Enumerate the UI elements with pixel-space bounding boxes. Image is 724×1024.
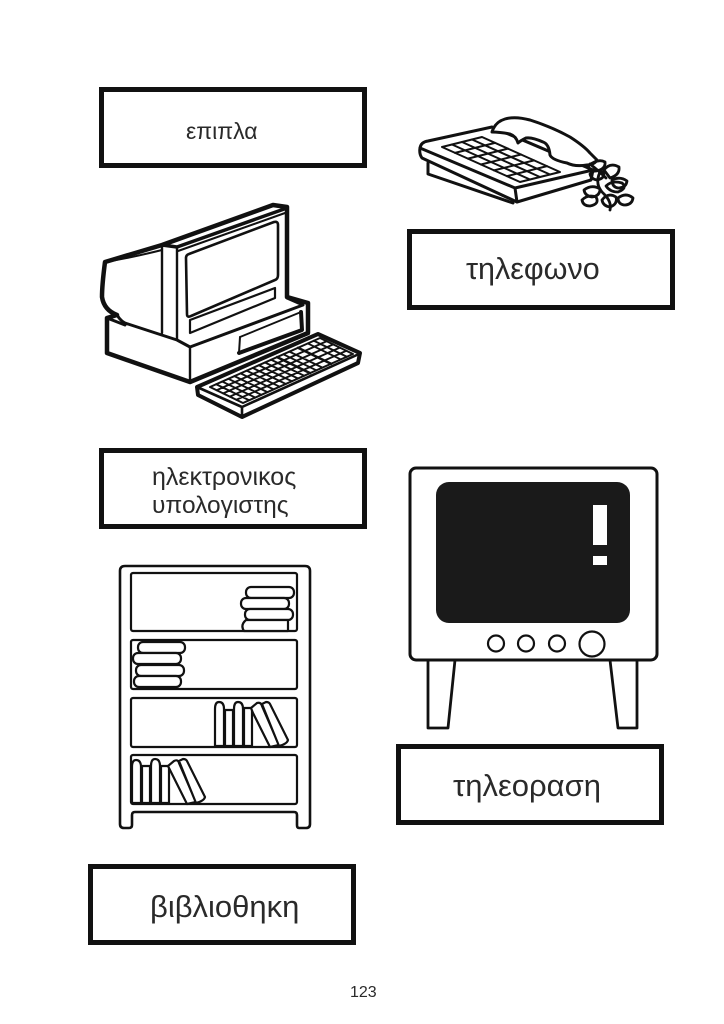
tv screen: [436, 482, 630, 623]
label: επιπλα: επιπλα: [186, 118, 258, 144]
tv knobs: [488, 632, 604, 656]
books: top shelf stack: [241, 587, 294, 631]
books: third shelf row: [215, 702, 288, 747]
drive slot: [239, 312, 302, 353]
label: τηλεοραση: τηλεοραση: [453, 768, 601, 803]
icon: desktop computer: [102, 205, 360, 417]
label: ηλεκτρονικος υπολογιστης: ηλεκτρονικος: [152, 463, 296, 491]
label: τηλεφωνο: τηλεφωνο: [466, 252, 600, 286]
exclamation mark: [593, 505, 607, 565]
icon: telephone: [420, 118, 633, 210]
page number: 123: [350, 984, 377, 1001]
icon: bookcase: [120, 566, 310, 828]
label: βιβλιοθηκη: [88, 864, 356, 945]
label: τηλεφωνο: [407, 229, 675, 310]
label: τηλεοραση: [396, 744, 664, 825]
icon: television: [410, 468, 657, 728]
label: ηλεκτρονικος υπολογιστης: υπολογιστης: [152, 492, 289, 519]
books: bottom shelf row: [132, 759, 205, 804]
books: second shelf stack: [133, 642, 185, 687]
label: βιβλιοθηκη: βιβλιοθηκη: [150, 889, 299, 924]
label: επιπλα: [99, 87, 367, 168]
label: ηλεκτρονικος υπολογιστης: [99, 448, 367, 529]
